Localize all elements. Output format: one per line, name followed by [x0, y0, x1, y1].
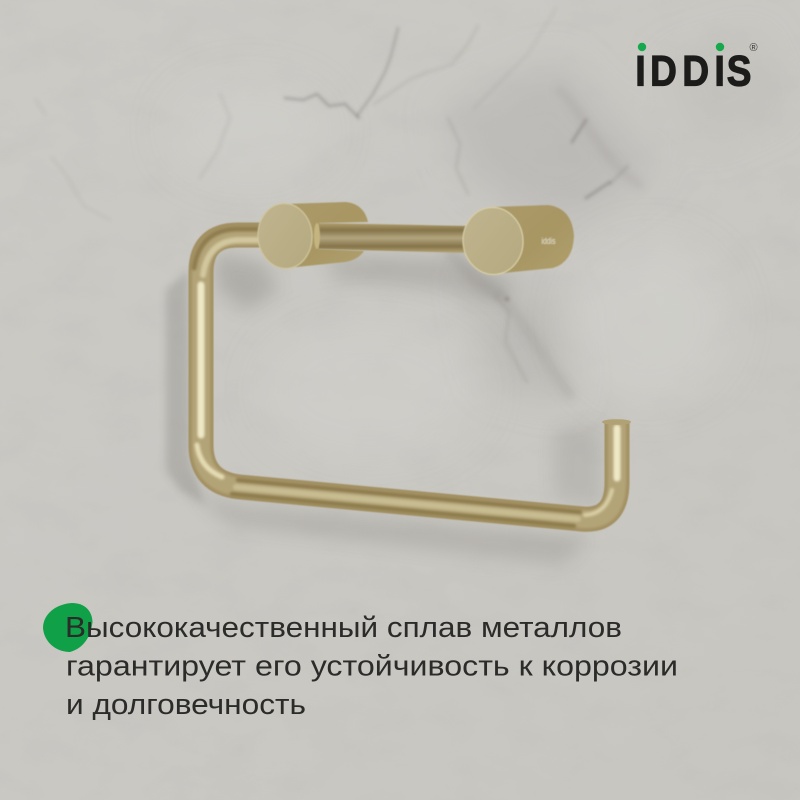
logo wordmark: IDDIS: [635, 48, 751, 95]
engraved brand mark: iddis: [542, 236, 556, 246]
registered mark: ®: [749, 42, 758, 54]
logo green dots: [638, 43, 724, 51]
tube end cap: [602, 419, 631, 425]
tube highlights and dark reflection bands: [194, 229, 617, 526]
caption with green accent: [43, 603, 678, 721]
right mount cylinder: [461, 205, 574, 277]
shadow of the holder on the wall: [166, 252, 602, 565]
caption text: гарантирует его устойчивость к коррозии: [66, 650, 678, 682]
connecting rod: [318, 223, 470, 253]
icon: green blob accent: [43, 603, 92, 652]
caption text: и долговечность: [66, 689, 306, 721]
paper holder ring: [194, 229, 631, 526]
left mount cylinder: [256, 202, 368, 270]
caption text: Высококачественный сплав металлов: [65, 612, 622, 644]
caption text: [65, 612, 678, 721]
logo: [635, 42, 758, 95]
